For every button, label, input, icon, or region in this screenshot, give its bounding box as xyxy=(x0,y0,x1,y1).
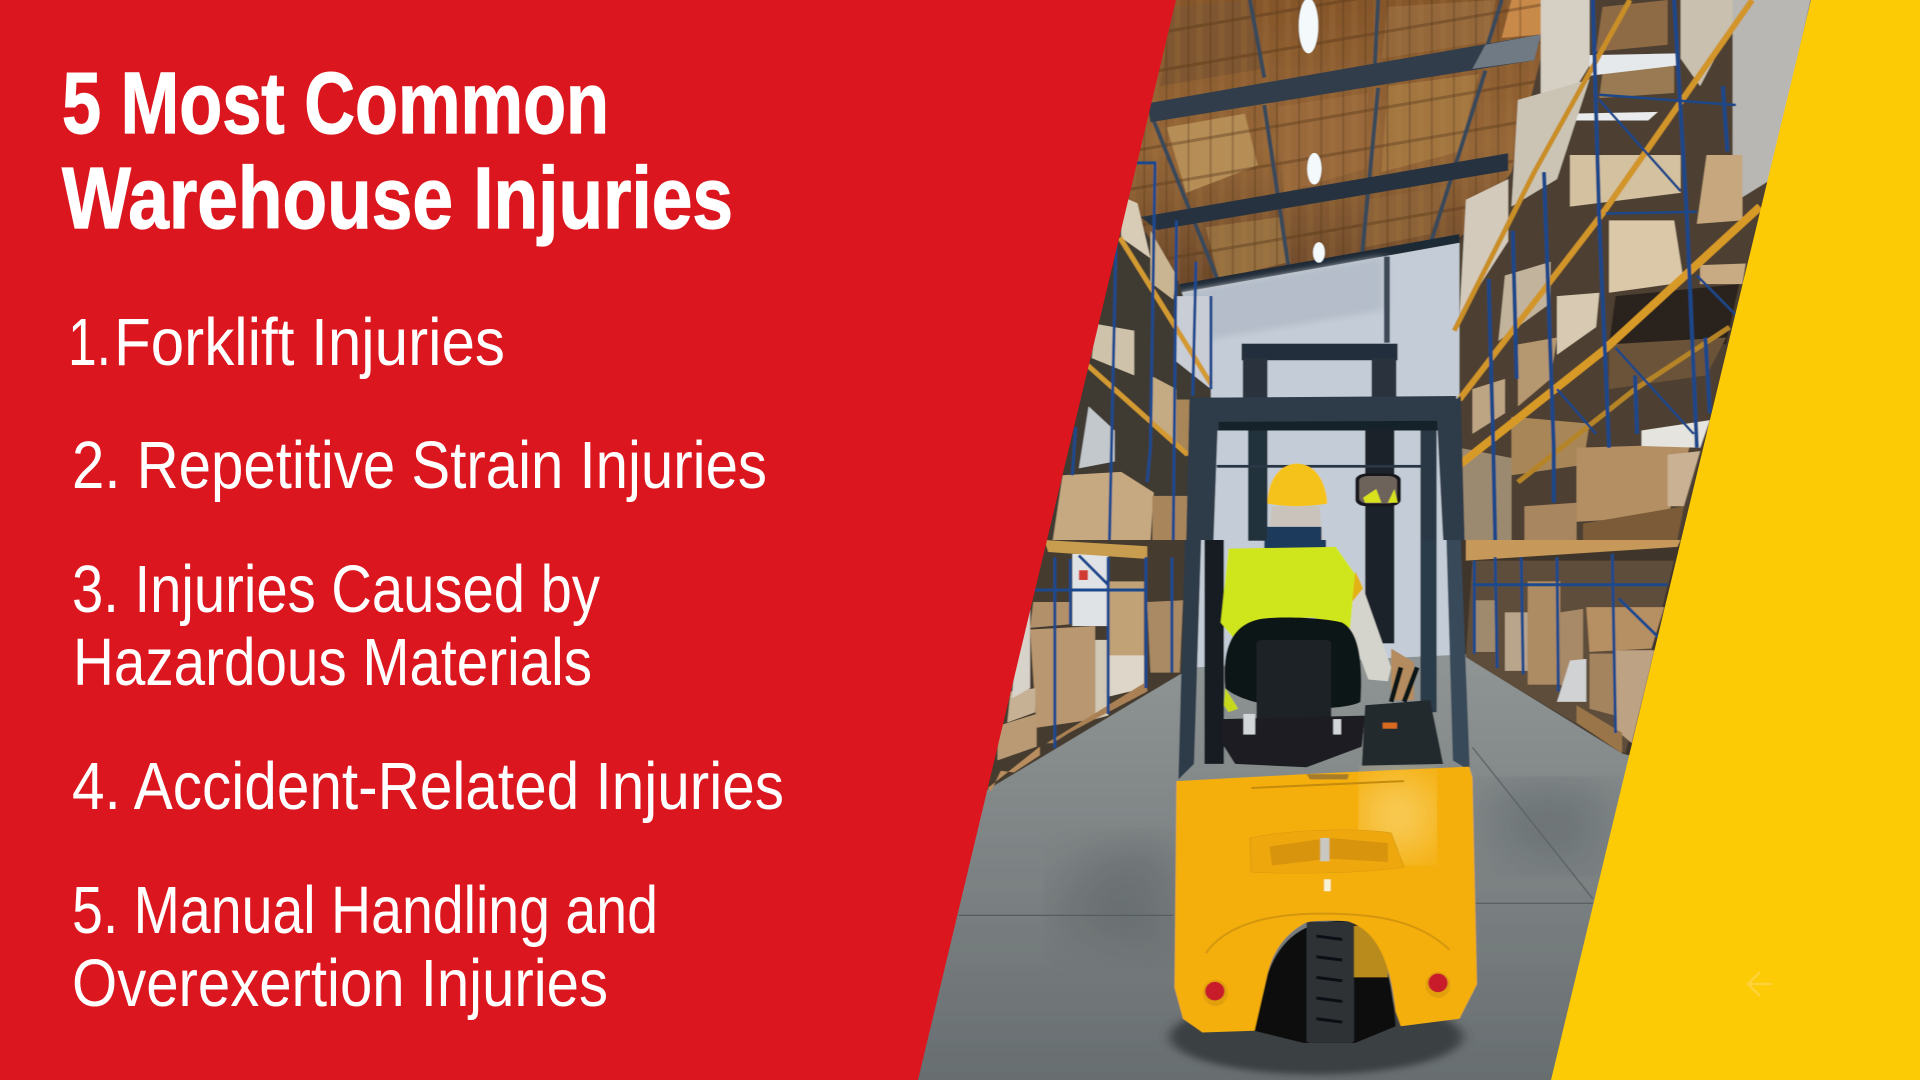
rear wheel opening xyxy=(1255,921,1396,1043)
list item 3: Hazardous Materials xyxy=(73,625,592,700)
title: Warehouse Injuries xyxy=(62,150,733,247)
icon: faint arrow xyxy=(1748,972,1772,996)
title xyxy=(62,55,733,247)
list item 5 xyxy=(72,873,658,1021)
photo: warehouse aisle with forklift xyxy=(900,0,1920,1080)
list item 1: Forklift Injuries xyxy=(114,305,505,380)
photo base shading xyxy=(900,0,1920,827)
frame pillars xyxy=(1186,396,1465,540)
list item 4: 4. Accident-Related Injuries xyxy=(72,749,784,824)
list item 5: Overexertion Injuries xyxy=(72,946,608,1021)
list item 1: 1. xyxy=(68,305,111,380)
seat xyxy=(1222,618,1365,767)
title: 5 Most Common xyxy=(62,55,609,152)
floor xyxy=(913,654,1635,1080)
panel: red text background xyxy=(0,0,1176,1080)
list item 5: 5. Manual Handling and xyxy=(72,873,658,948)
rear body detail xyxy=(1206,774,1450,953)
floor markings and shading xyxy=(959,747,1609,1074)
panel: yellow right band xyxy=(1551,0,1920,1080)
tail lights xyxy=(1203,972,1450,1006)
right racking xyxy=(1454,0,1811,540)
mast xyxy=(1242,344,1398,541)
list item 3: 3. Injuries Caused by xyxy=(72,552,600,627)
ceiling xyxy=(1115,0,1557,293)
operator xyxy=(1221,464,1414,712)
lower shelves, both sides xyxy=(965,540,1713,791)
back wall xyxy=(1180,243,1459,682)
controls xyxy=(1362,667,1443,766)
overhead guard xyxy=(1189,396,1459,541)
operator neck and hat xyxy=(1268,506,1323,540)
forklift xyxy=(1175,344,1477,1043)
list item 2: 2. Repetitive Strain Injuries xyxy=(72,428,767,503)
left racking xyxy=(1043,163,1211,540)
list item 3 xyxy=(72,552,600,700)
mirror xyxy=(1355,474,1401,506)
rear body xyxy=(1175,767,1477,1032)
